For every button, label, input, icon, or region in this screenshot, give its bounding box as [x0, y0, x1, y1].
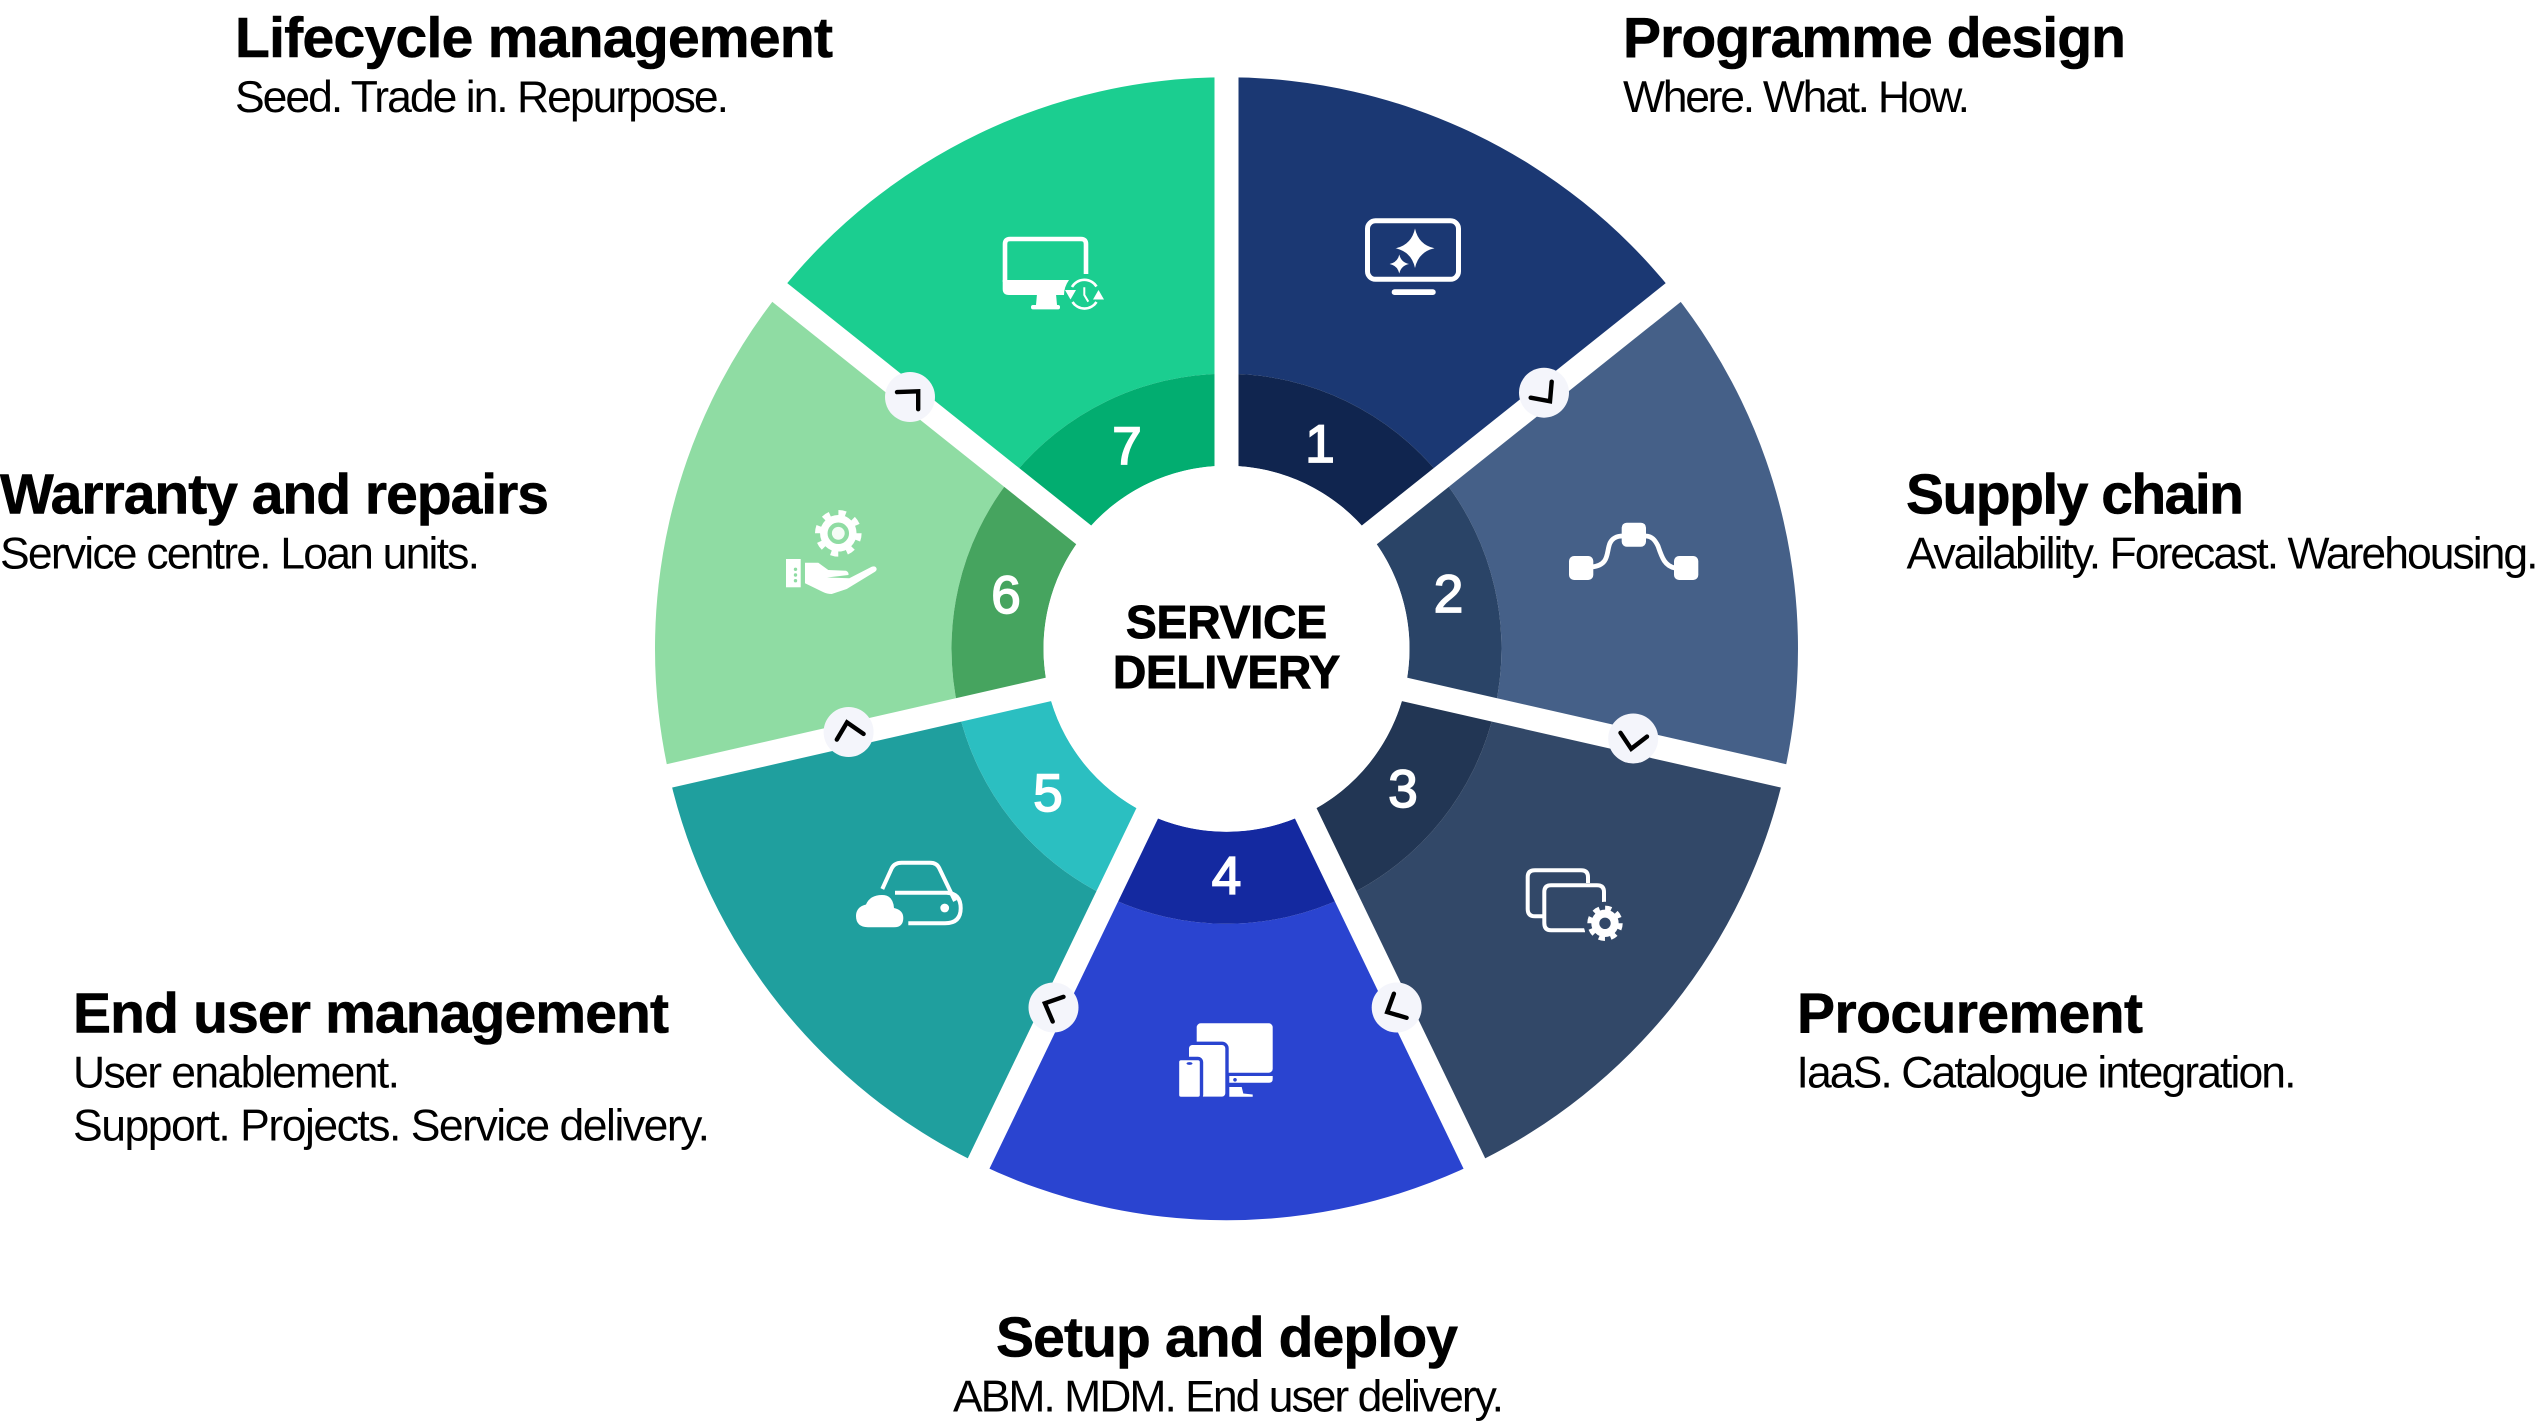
number 7: 7 [1112, 417, 1142, 476]
arrow badge: 2 to 3 [1608, 714, 1658, 764]
description: warranty and repairs: Service centre. Loan units. [0, 530, 480, 578]
number 2: 2 [1434, 565, 1463, 624]
number 4: 4 [1212, 847, 1241, 906]
segment 7 number band [1012, 374, 1226, 535]
segment 4 number band [1107, 814, 1346, 924]
description: lifecycle management: Seed. Trade in. Repurpose. [235, 73, 729, 122]
number 5: 5 [1033, 764, 1063, 823]
heading: procurement: Procurement [1797, 982, 2143, 1046]
text block: end user management [73, 982, 710, 1150]
segment 2 outer band [1442, 292, 1798, 776]
segment 5 number band [958, 689, 1147, 897]
number 6: 6 [991, 566, 1021, 625]
arrow badge: 6 to 7 [885, 372, 935, 422]
text block: setup and deploy [953, 1306, 1504, 1422]
description line 2: end user management: Support. Projects. Service delivery. [73, 1102, 710, 1150]
icon: monitor with sparkles [1368, 221, 1458, 295]
segment 6 outer band [655, 292, 1012, 776]
icon: devices [1178, 1023, 1273, 1098]
centre title [1113, 596, 1340, 698]
arrow badge: 4 to 5 [1028, 982, 1078, 1032]
centre hub [1044, 466, 1410, 832]
description: setup and deploy: ABM. MDM. End user delivery. [953, 1372, 1504, 1422]
segment 3 number band [1306, 689, 1495, 897]
segment 1 outer band [1226, 77, 1673, 477]
segment 6 number band [951, 477, 1083, 710]
text block: warranty and repairs [0, 462, 549, 578]
heading: warranty and repairs: Warranty and repairs [0, 462, 549, 526]
icon: monitor with clock [1003, 239, 1104, 309]
number 1: 1 [1305, 415, 1335, 474]
description: supply chain: Availability. Forecast. Warehousing. [1906, 530, 2538, 578]
panel: segment 1 programme design [1226, 77, 1673, 535]
number 3: 3 [1388, 760, 1418, 819]
icon: drive with cloud [856, 863, 961, 927]
panel: segment 6 warranty and repairs [655, 292, 1083, 776]
panel: segment 3 procurement [1306, 689, 1784, 1164]
segment 4 outer band [979, 897, 1474, 1220]
text block: procurement [1796, 982, 2296, 1098]
arrow badge: 3 to 4 [1372, 982, 1422, 1032]
text block: programme design [1623, 6, 2126, 122]
segment 1 number band [1226, 374, 1442, 535]
panel: segment 2 supply chain [1370, 292, 1798, 776]
segment 2 number band [1370, 477, 1502, 710]
description line 1: end user management: User enablement. [73, 1048, 400, 1098]
description: procurement: IaaS. Catalogue integration. [1796, 1048, 2296, 1098]
centre title line 2: DELIVERY [1113, 646, 1340, 698]
panel: segment 4 setup and deploy [979, 814, 1474, 1220]
heading: setup and deploy: Setup and deploy [996, 1306, 1458, 1370]
text block: lifecycle management [235, 6, 833, 122]
heading: supply chain: Supply chain [1906, 462, 2244, 526]
heading: end user management: End user management [73, 982, 669, 1046]
segment 3 outer band [1346, 710, 1784, 1164]
description: programme design: Where. What. How. [1623, 73, 1970, 122]
segment 5 outer band [669, 710, 1107, 1164]
icon: windows with gear [1528, 870, 1625, 943]
arrow badge: 1 to 2 [1519, 368, 1569, 418]
centre title line 1: SERVICE [1126, 596, 1327, 648]
icon: connected nodes [1569, 523, 1698, 580]
arrow badge: 5 to 6 [824, 707, 874, 757]
panel: segment 5 end user management [669, 689, 1147, 1164]
icon: hand with gear [786, 513, 877, 594]
text block: supply chain [1906, 462, 2538, 578]
panel: segment 7 lifecycle management [780, 77, 1226, 535]
heading: lifecycle management: Lifecycle management [235, 6, 833, 70]
heading: programme design: Programme design [1623, 6, 2126, 70]
segment 7 outer band [780, 77, 1226, 477]
